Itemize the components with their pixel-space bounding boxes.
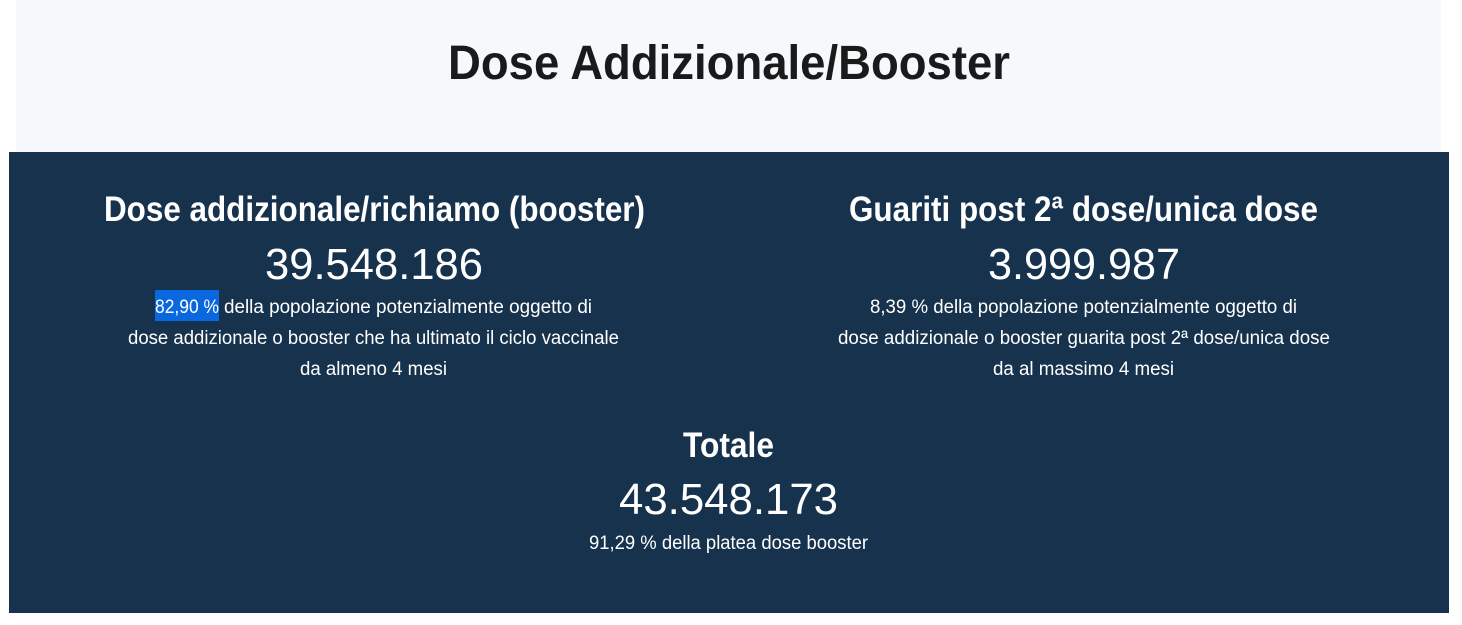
header panel <box>16 0 1441 152</box>
description: recovered: da al massimo 4 mesi <box>993 359 1174 380</box>
stat block: recovered <box>838 190 1330 380</box>
panel: statistics <box>9 152 1449 613</box>
number: total: 43.548.173 <box>619 475 838 524</box>
description: booster dose: da almeno 4 mesi <box>300 359 447 380</box>
description: total: 91,29 % della platea dose booster <box>589 533 869 554</box>
description: recovered: dose addizionale o booster guarita post 2ª dose/unica dose <box>838 328 1330 349</box>
number: recovered: 3.999.987 <box>988 240 1180 289</box>
stat block: total <box>589 426 869 554</box>
title: Dose Addizionale/Booster <box>448 37 1010 90</box>
highlighted percentage: 82,90 % <box>155 297 219 318</box>
description: recovered: 8,39 % della popolazione potenzialmente oggetto di <box>870 297 1297 318</box>
description: recovered <box>838 297 1330 380</box>
description: booster dose: dose addizionale o booster che ha ultimato il ciclo vaccinale <box>128 328 619 349</box>
number: booster dose: 39.548.186 <box>265 240 483 289</box>
description: booster dose <box>128 297 619 380</box>
heading: total: Totale <box>683 426 774 465</box>
highlighted percentage <box>155 290 219 321</box>
stat block: booster dose <box>104 190 645 380</box>
description: booster dose: della popolazione potenzialmente oggetto di <box>224 297 592 318</box>
heading: recovered: Guariti post 2ª dose/unica dose <box>849 190 1318 229</box>
heading: booster dose: Dose addizionale/richiamo (booster) <box>104 190 645 229</box>
